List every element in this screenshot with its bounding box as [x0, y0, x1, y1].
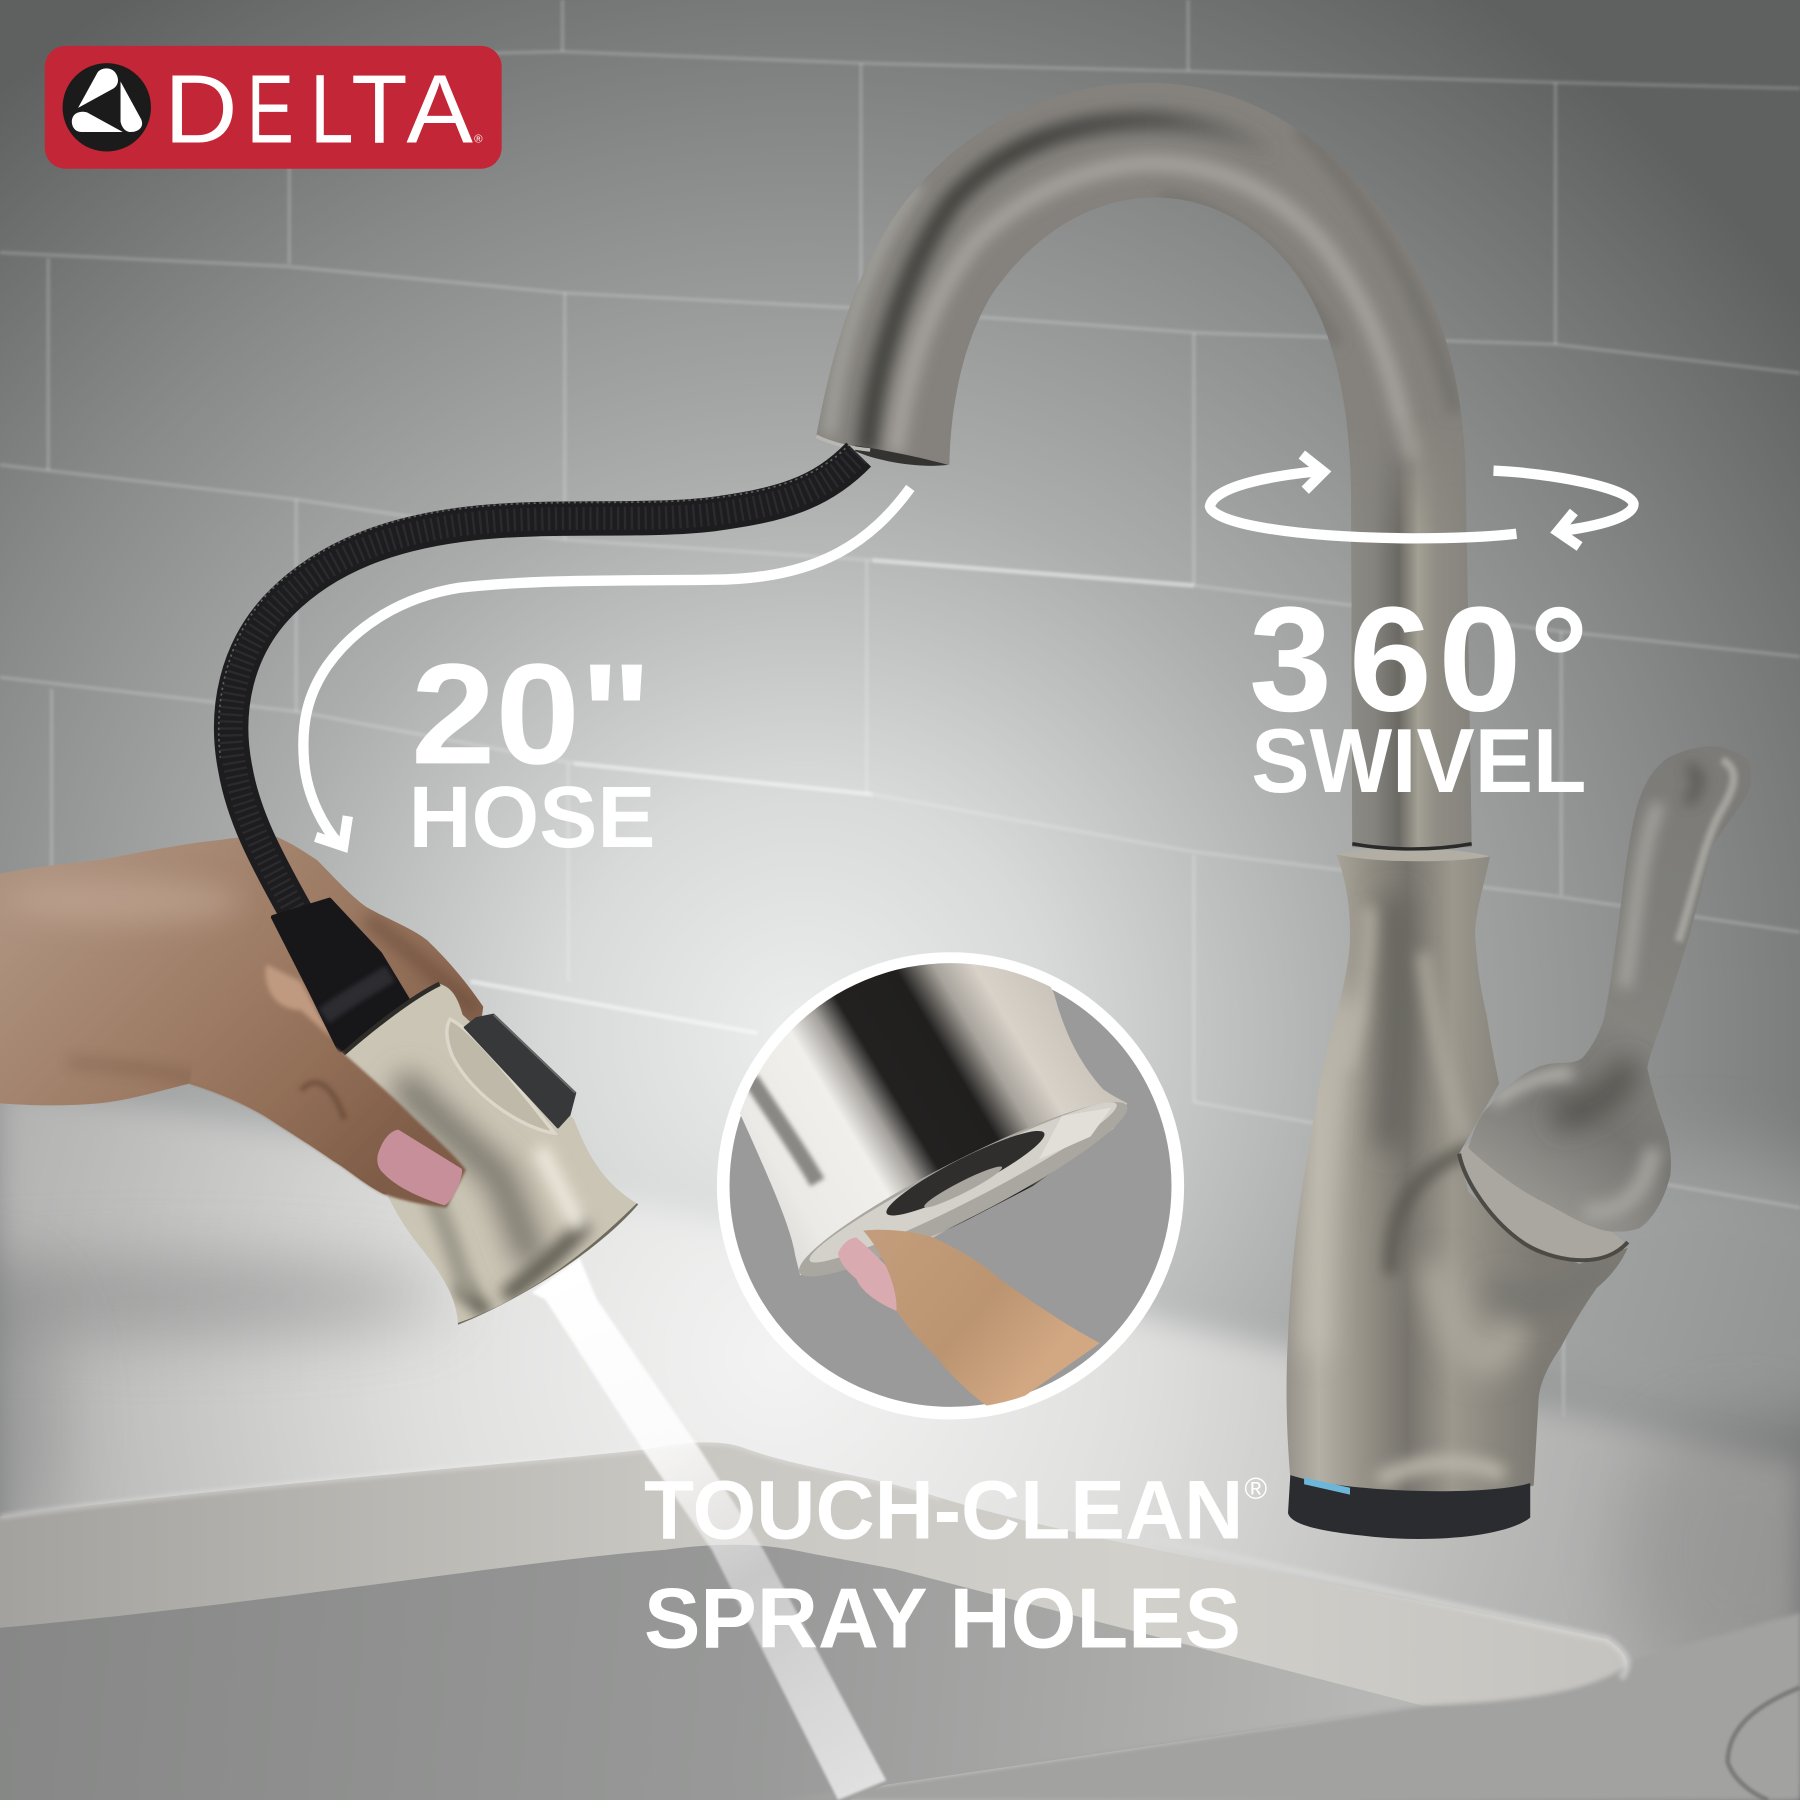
- label: 20 inch hose: [409, 634, 655, 866]
- inset circle: touch-clean spray holes: [723, 953, 1178, 1414]
- spray head: [342, 982, 638, 1325]
- label: 20 inch hose: HOSE: [409, 769, 655, 866]
- spray head teardrop: [447, 1019, 554, 1133]
- faucet body: [1274, 844, 1642, 1498]
- logo wordmark: E: [247, 54, 294, 163]
- spray head button: [465, 1015, 575, 1127]
- label: touch-clean spray holes: TOUCH-CLEAN: [644, 1462, 1243, 1556]
- logo wordmark: T: [351, 54, 408, 163]
- logo wordmark: L: [310, 54, 354, 163]
- braided hose: [219, 444, 859, 913]
- Delta logo badge: [45, 46, 502, 169]
- hand, palm behind spray head: [0, 836, 484, 1195]
- label: touch-clean spray holes: [644, 1462, 1267, 1665]
- fingernail: [838, 1238, 897, 1311]
- label: 360 degree swivel: SWIVEL: [1251, 711, 1586, 812]
- fingertip: [863, 1230, 1100, 1414]
- logo wordmark: A: [406, 54, 473, 163]
- logo wordmark: D: [164, 54, 238, 163]
- spout opening: [816, 436, 948, 466]
- sink rim and basin: [0, 1442, 1800, 1800]
- faucet spout arch: [792, 69, 1492, 861]
- thumb and nail: [189, 987, 466, 1208]
- hose length arrow: [303, 488, 910, 846]
- label: 360 degree swivel: 360°: [1249, 576, 1589, 743]
- label: touch-clean spray holes: ®: [1244, 1471, 1267, 1506]
- handle ring and lever: [1458, 735, 1768, 1262]
- icon: delta triangle mark: [63, 63, 151, 152]
- metal spray face: [740, 963, 1128, 1276]
- countertop: [0, 1085, 1800, 1800]
- label: 20 inch hose: 20": [411, 634, 652, 794]
- logo wordmark: [164, 54, 473, 163]
- label: touch-clean spray holes: SPRAY HOLES: [644, 1570, 1241, 1665]
- swivel rotation arrows: [1210, 455, 1634, 546]
- hose connector: [273, 900, 410, 1050]
- Delta logo badge: ®: [474, 133, 483, 145]
- touch base with blue LED: [1288, 1475, 1530, 1539]
- water stream: [532, 1258, 886, 1800]
